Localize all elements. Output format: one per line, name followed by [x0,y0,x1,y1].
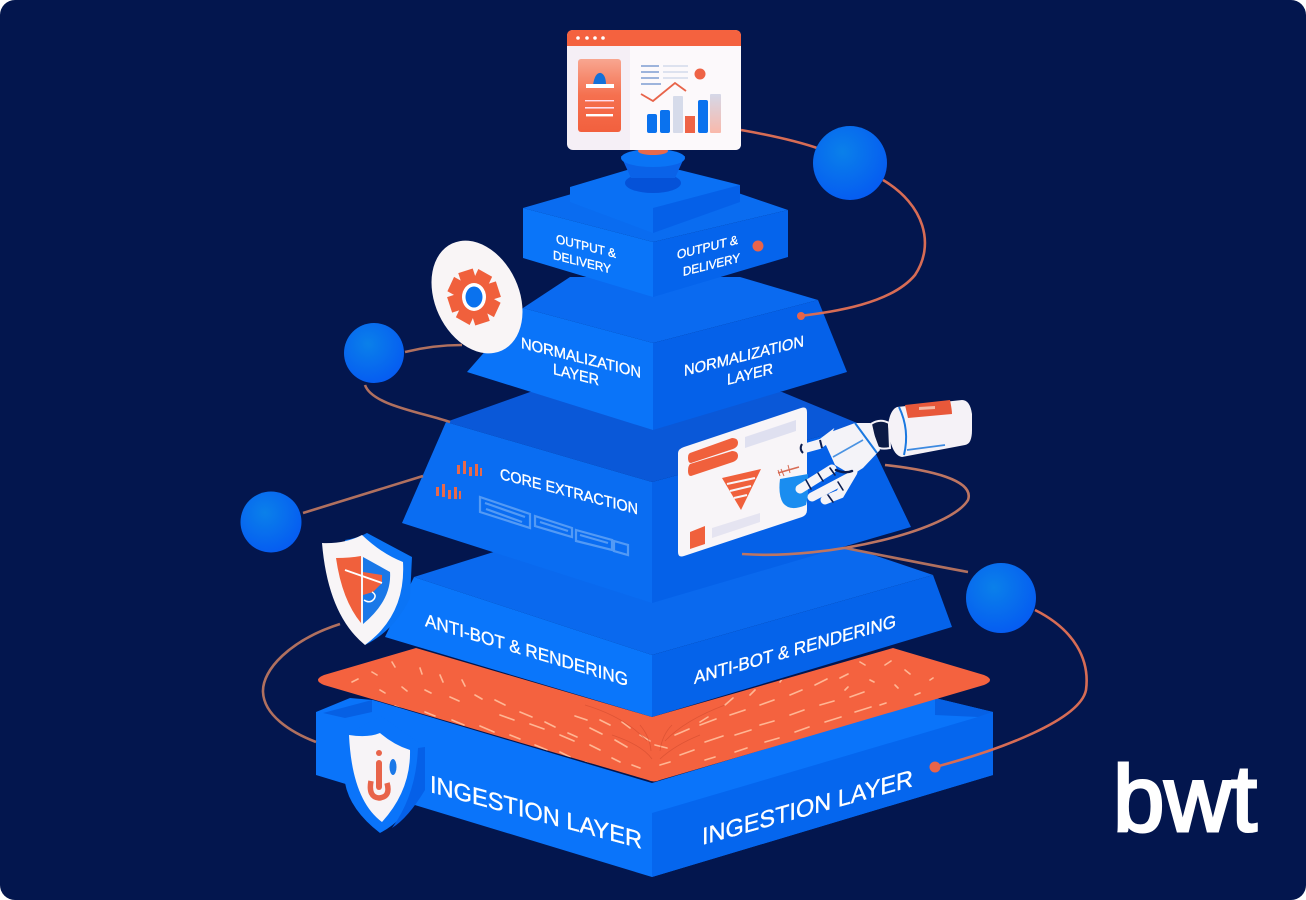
label: ingestion right: INGESTION LAYER [702,765,913,851]
bottle [888,400,972,457]
icon: robot arm and bottle [800,400,972,502]
connector strap [871,421,890,449]
thumb [803,431,832,452]
label: normalization right: NORMALIZATION [684,333,804,380]
label: output left: OUTPUT & [556,232,616,261]
blurred data strip [480,497,628,555]
sphere left middle [240,492,302,552]
layer: ingestion [316,698,993,877]
logo: bwt: bwt [1113,746,1257,851]
dashboard bar chart [647,94,721,133]
layer: output and delivery [523,170,788,297]
icon: feature card [678,408,808,556]
label: core extraction: CORE EXTRACTION [500,466,638,518]
orange data sheet [318,648,990,782]
label: delivery right: DELIVERY [683,251,740,279]
label: layer left: LAYER [553,361,599,389]
label: anti-bot right: ANTI-BOT & RENDERING [694,610,896,688]
dashboard dot [694,68,706,80]
label: layer right: LAYER [727,361,773,389]
fingers [800,468,853,502]
label: ingestion left: INGESTION LAYER [430,771,642,855]
gear hub [462,283,486,311]
dashboard monitor [567,30,741,150]
icon: anti-bot shield [322,533,412,645]
label: normalization left: NORMALIZATION [521,335,641,382]
dashboard line chart [641,83,686,101]
layer: anti-bot and rendering [385,547,952,717]
pedestal neck [621,147,685,193]
gear [427,249,521,345]
dashboard text lines [641,65,688,85]
connector curves [263,130,1087,767]
label: delivery left: DELIVERY [553,248,611,277]
label: output right: OUTPUT & [677,233,739,262]
node dots [752,240,940,772]
icon: small orange waveforms [436,461,482,499]
icon: gear disc [414,226,540,368]
sphere left upper [344,323,404,383]
label: anti-bot left: ANTI-BOT & RENDERING [425,609,628,690]
sphere right lower [966,563,1036,633]
layer: normalization [467,277,847,430]
layer: core extraction [402,392,911,603]
dashboard side card [578,59,621,132]
forearm [825,423,880,475]
sphere top right [813,126,887,200]
icon: ingestion shield [345,716,425,833]
